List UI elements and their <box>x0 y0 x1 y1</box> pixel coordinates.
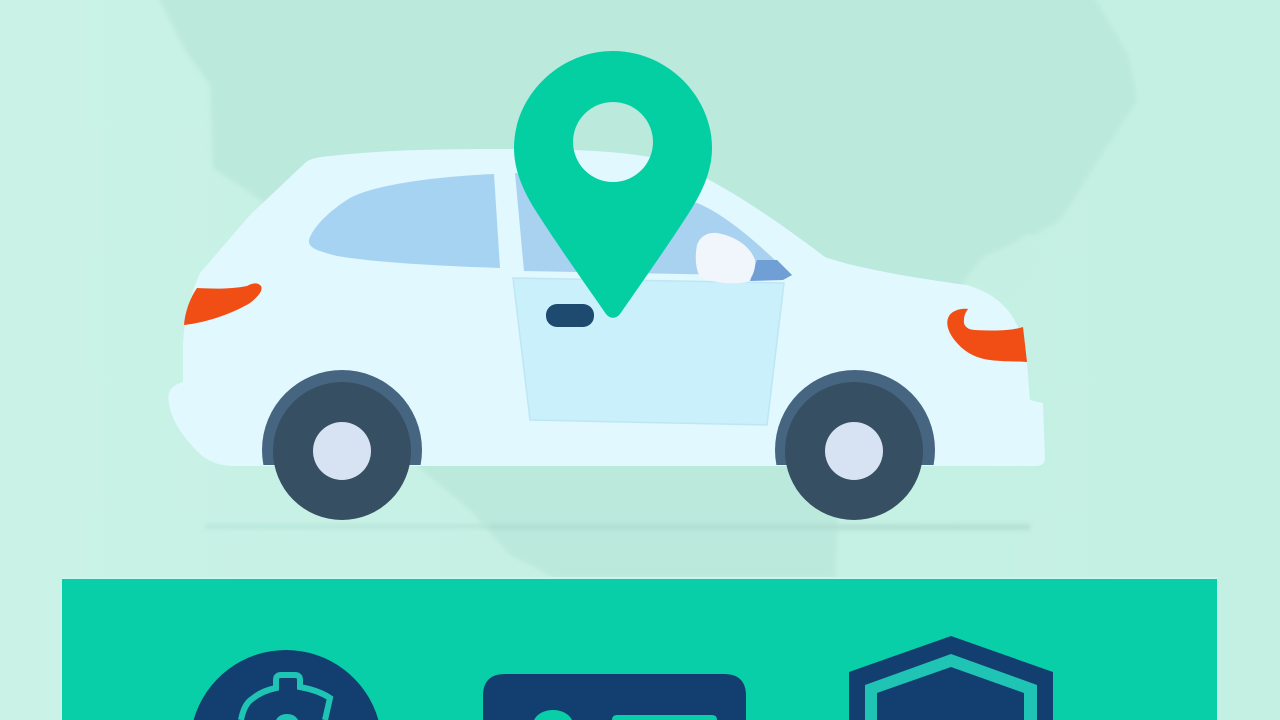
window corner <box>750 260 792 281</box>
front light <box>947 309 1027 362</box>
front wheel <box>775 370 935 530</box>
car body <box>168 149 1045 466</box>
car <box>168 149 1045 530</box>
door handle <box>546 304 594 327</box>
rear wheel <box>262 370 422 530</box>
rear window <box>309 174 500 268</box>
icon: shield <box>849 636 1053 720</box>
icon: dollar coin <box>194 650 378 720</box>
door <box>513 278 784 425</box>
front window <box>515 173 792 276</box>
ground shadow <box>205 524 1030 530</box>
rear light <box>184 283 262 325</box>
bottom panel <box>62 577 1217 720</box>
light coast patch <box>965 232 1040 300</box>
icon: id card <box>483 674 746 720</box>
side mirror <box>696 233 755 283</box>
location pin <box>514 51 712 318</box>
background map shape <box>155 0 1137 578</box>
